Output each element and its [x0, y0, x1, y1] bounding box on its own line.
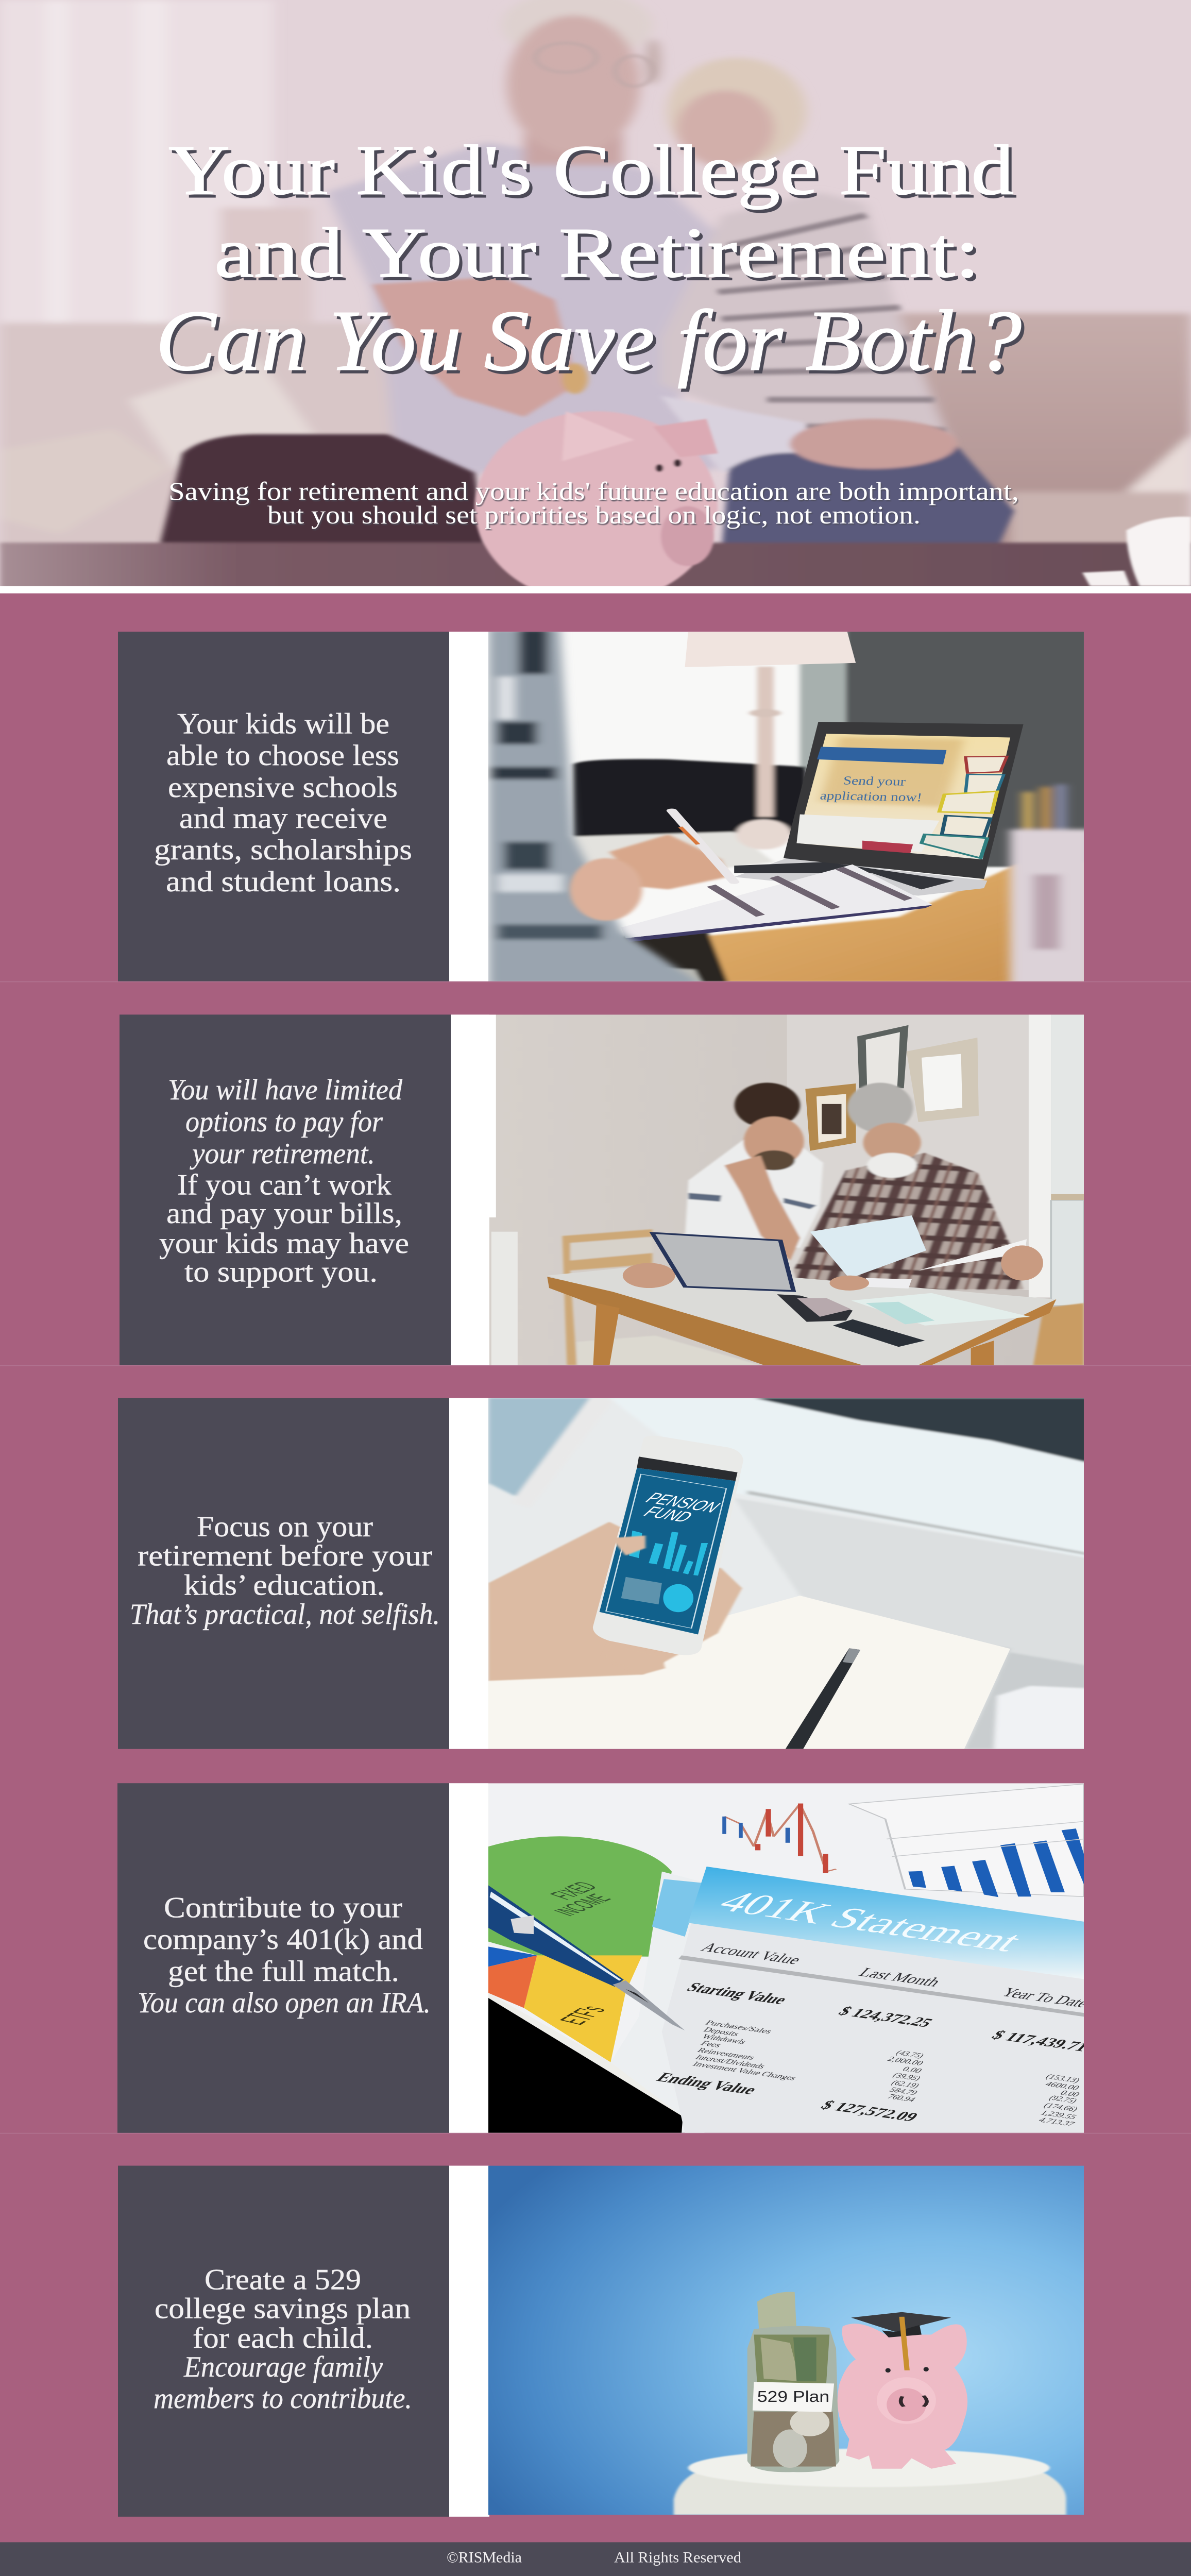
- front statement sheet: $ 124,372.25: [835, 2004, 937, 2030]
- footer background: [0, 2542, 1191, 2576]
- front statement sheet: Investment Value Changes: [691, 2060, 798, 2082]
- hero subtitle: [168, 478, 1019, 529]
- row 2 text: If you can’t work: [177, 1169, 392, 1201]
- front statement sheet: Deposits: [701, 2026, 741, 2038]
- pie chart sheet: INCOME: [548, 1891, 617, 1919]
- row 5 text: Encourage family: [183, 2351, 383, 2383]
- pedestal: [674, 2449, 1066, 2515]
- row 2 text: to support you.: [184, 1256, 378, 1289]
- row 3 text: That’s practical, not selfish.: [130, 1598, 440, 1631]
- row 5 text: [154, 2264, 412, 2415]
- back sheet: [610, 1872, 705, 2133]
- picture frames: [805, 1025, 979, 1151]
- pig with graduation cap: [838, 2312, 967, 2469]
- front statement sheet: Reinvestments: [695, 2047, 757, 2061]
- title line 2: and Your Retirement:: [214, 213, 980, 292]
- panel: row 5 529 savings plan: [118, 2166, 1084, 2517]
- subtitle line 2: but you should set priorities based on logic, not emotion.: [267, 501, 921, 529]
- front statement sheet: Ending Value: [653, 2070, 761, 2097]
- row 5 text: members to contribute.: [154, 2382, 412, 2415]
- text block dark card: [118, 2166, 449, 2517]
- photo: piggy bank and 529 jar: [488, 2166, 1084, 2515]
- row 3 text: Focus on your: [197, 1511, 373, 1543]
- front statement sheet: 2,000.00: [885, 2056, 926, 2067]
- pie chart sheet: ETF's: [553, 2003, 613, 2027]
- footer credit: ©RISMedia: [447, 2549, 522, 2566]
- jar: [747, 2292, 839, 2472]
- footer bar: [0, 2542, 1191, 2576]
- row 1 text: and may receive: [179, 802, 387, 835]
- row 1 text: Your kids will be: [177, 708, 389, 740]
- front statement sheet: Withdrawls: [700, 2033, 748, 2045]
- front statement sheet: Interest/Dividends: [693, 2054, 768, 2070]
- photo: laptop college application: [488, 632, 1084, 981]
- front statement sheet: Fees: [699, 2040, 724, 2049]
- phone: PENSION: [641, 1489, 725, 1516]
- front statement sheet: (62.19): [889, 2079, 922, 2090]
- row 5 text: Create a 529: [205, 2264, 361, 2296]
- white gutter: [449, 632, 488, 981]
- row 1 text: able to choose less: [166, 739, 399, 772]
- subtitle line 1: Saving for retirement and your kids' future education are both important,: [168, 478, 1019, 505]
- row 4 text: company’s 401(k) and: [143, 1923, 423, 1956]
- phone: FUND: [639, 1503, 698, 1525]
- pie chart sheet: [488, 1836, 705, 2133]
- front statement sheet: [653, 1867, 1094, 2133]
- white gutter: [449, 1783, 488, 2133]
- white gutter: [449, 2166, 489, 2517]
- man's glasses: [536, 43, 653, 87]
- jar: 529 Plan: [757, 2388, 829, 2405]
- text block dark card: [120, 1014, 451, 1365]
- row 3 text: kids’ education.: [184, 1569, 385, 1601]
- footer rights: All Rights Reserved: [614, 2549, 741, 2566]
- front statement sheet: 0.00: [1058, 2089, 1082, 2098]
- front statement sheet: 584.79: [887, 2086, 920, 2096]
- candlestick chart: [722, 1804, 836, 1873]
- white gutter: [451, 1014, 489, 1365]
- phone: [593, 1436, 743, 1655]
- row 2 text: options to pay for: [185, 1106, 383, 1138]
- row 2 text: and pay your bills,: [166, 1198, 402, 1230]
- laptop: [734, 722, 1024, 896]
- laptop: [652, 1233, 793, 1291]
- young man: [685, 1139, 823, 1248]
- front statement sheet: (43.75): [894, 2049, 926, 2059]
- pen: [488, 1885, 685, 2030]
- row 5 text: for each child.: [193, 2322, 373, 2354]
- row 2 text: your kids may have: [159, 1227, 409, 1260]
- front statement sheet: Purchases/Sales: [703, 2019, 774, 2035]
- chair: [563, 1229, 652, 1365]
- front statement sheet: 0.00: [900, 2065, 924, 2075]
- laptop: Send your: [842, 774, 907, 788]
- row 4 text: [138, 1892, 431, 2019]
- hand: [488, 1522, 742, 1681]
- title line 1: Your Kid's College Fund: [168, 131, 1014, 210]
- laptop: application now!: [819, 789, 923, 804]
- letters held: [810, 1215, 926, 1279]
- old man: [793, 1153, 1024, 1291]
- row 1 text: grants, scholarships: [154, 834, 412, 866]
- text block dark card: [118, 632, 449, 981]
- row 1 text: [154, 708, 412, 898]
- white divider band under hero: [0, 586, 1191, 594]
- row 2 text: You will have limited: [168, 1074, 403, 1106]
- front statement sheet: Account Value: [697, 1940, 805, 1967]
- panel: row 4 401(k) contribution: [117, 1783, 1094, 2133]
- papers and hands: [621, 865, 933, 942]
- panel: row 3 focus on retirement: [118, 1398, 1089, 1749]
- table: [547, 1265, 1056, 1365]
- photo: father and son reviewing bills: [489, 1014, 1084, 1365]
- white gutter: [449, 1398, 488, 1749]
- front statement sheet: 760.94: [885, 2093, 918, 2103]
- panel: row 1 less expensive schools: [118, 629, 1093, 985]
- row 3 text: retirement before your: [138, 1540, 432, 1572]
- hero title: [156, 131, 1022, 388]
- text block dark card: [117, 1783, 449, 2133]
- front statement sheet: Starting Value: [683, 1979, 792, 2007]
- text block dark card: [118, 1398, 449, 1749]
- row 4 text: Contribute to your: [164, 1892, 402, 1924]
- pie chart sheet: FIXED: [544, 1879, 604, 1902]
- photo: 401K statement: [488, 1783, 1094, 2133]
- row 1 text: and student loans.: [166, 866, 401, 898]
- row 3 text: [130, 1511, 440, 1631]
- row 2 text: [159, 1074, 409, 1289]
- row 4 text: You can also open an IRA.: [138, 1987, 431, 2019]
- row 5 text: college savings plan: [155, 2293, 411, 2325]
- panel: row 2 limited retirement options: [120, 1014, 1084, 1367]
- bar chart: [849, 1784, 1084, 1897]
- row 4 text: get the full match.: [168, 1955, 399, 1988]
- hero photo: couple with piggy bank: [0, 0, 1191, 586]
- photo: pension fund phone: [488, 1398, 1084, 1749]
- front statement sheet: (39.95): [891, 2072, 923, 2082]
- row 2 text: your retirement.: [190, 1138, 375, 1170]
- title line 3: Can You Save for Both?: [156, 293, 1022, 388]
- front statement sheet: Last Month: [855, 1965, 945, 1989]
- row 1 text: expensive schools: [168, 771, 398, 804]
